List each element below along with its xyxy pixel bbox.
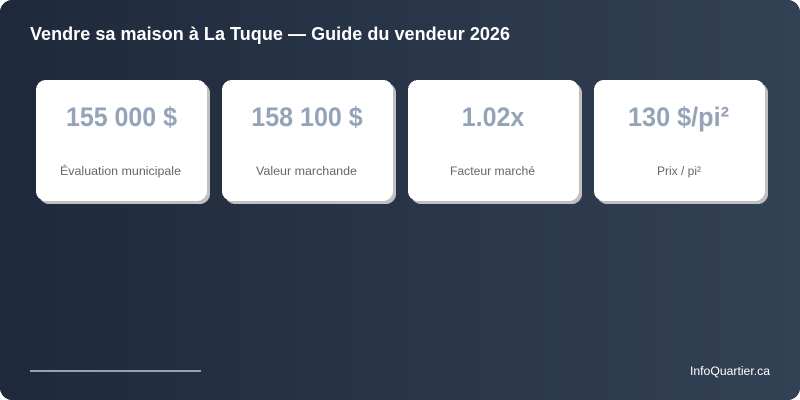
card: évaluation municipale: Évaluation municipale	[60, 163, 181, 178]
card: facteur marché	[408, 80, 582, 204]
card: facteur marché: Facteur marché	[450, 164, 535, 178]
title: Vendre sa maison à La Tuque — Guide du vendeur 2026	[30, 24, 510, 44]
card: valeur marchande: 158 100 $	[251, 102, 363, 132]
card: prix au pied carré: Prix / pi²	[657, 164, 701, 178]
accent line	[30, 370, 201, 372]
card: prix au pied carré	[594, 80, 768, 204]
footer brand: InfoQuartier.ca	[690, 364, 770, 378]
card: prix au pied carré: 130 $/pi²	[628, 102, 729, 132]
card: facteur marché: 1.02x	[462, 102, 524, 132]
card: valeur marchande	[222, 80, 396, 204]
card: valeur marchande: Valeur marchande	[256, 164, 357, 178]
card: évaluation municipale	[36, 80, 210, 204]
card: évaluation municipale: 155 000 $	[66, 102, 177, 132]
